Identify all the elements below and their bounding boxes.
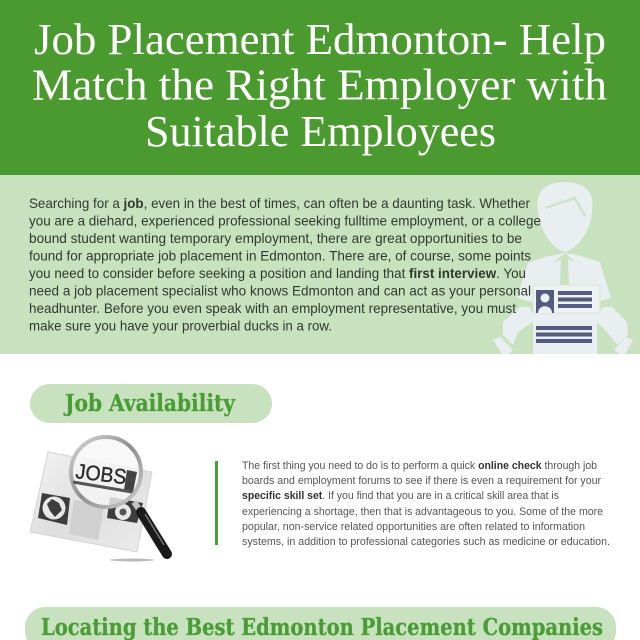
header band [0, 0, 640, 175]
job availability text: popular, non-service related opportunities are often related to information [242, 521, 585, 533]
tie and collar [553, 253, 576, 285]
intro text: headhunter. Before you even speak with an employment representative, you must [29, 301, 516, 316]
heading: Job Availability [30, 384, 272, 423]
icon: newspaper with magnifying glass: JOBS [74, 460, 128, 489]
accent bar [215, 461, 218, 545]
intro text: bound student wanting temporary employment, there are great opportunities to be [29, 231, 522, 246]
heading: Job Availability: Job Availability [63, 390, 236, 417]
job availability text: systems, in addition to professional categories such as medicine or education. [242, 536, 610, 548]
title: Match the Right Employer with [32, 60, 607, 110]
job availability text: The first thing you need to do is to perform a quick online check through job [242, 460, 597, 472]
job availability text: specific skill set. If you find that you are in a critical skill area that is [242, 490, 559, 502]
intro text: you need to consider before seeking a position and landing that first interview. You [29, 266, 526, 281]
intro text: need a job placement specialist who knows Edmonton and can act as your personal [29, 284, 531, 298]
job availability text: experiencing a shortage, then that is advantageous to you. Some of the more [242, 506, 603, 518]
intro text [29, 196, 541, 334]
panel: intro [0, 175, 640, 354]
icon: person holding resume [493, 182, 633, 354]
icon: newspaper with magnifying glass [30, 437, 167, 562]
title [32, 15, 607, 156]
intro text: Searching for a job, even in the best of times, can often be a daunting task. Whether [29, 196, 530, 211]
resume card [533, 285, 600, 343]
intro text: make sure you have your proverbial ducks in a row. [29, 318, 332, 334]
job availability text [242, 460, 610, 548]
title: Suitable Employees [145, 107, 496, 156]
title: Job Placement Edmonton- Help [34, 15, 606, 64]
intro text: you are a diehard, experienced professional seeking fulltime employment, or a college [29, 214, 541, 228]
intro text: found for appropriate job placement in Edmonton. There are, of course, some points [29, 248, 531, 264]
job availability text: boards and employment forums to see if there is even a requirement for your [242, 475, 601, 487]
